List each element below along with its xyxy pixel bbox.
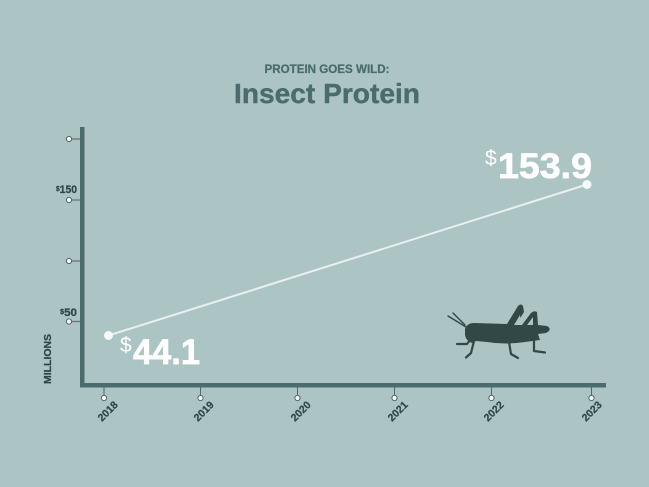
x axis labels: 2019 (192, 399, 217, 424)
y axis label: $150: $ (56, 186, 60, 193)
x axis labels: 2023 (580, 399, 605, 424)
x axis labels: 2020 (289, 399, 314, 424)
x axis labels: 2018 (96, 399, 121, 424)
value label: 2018: 44.1 (133, 333, 200, 372)
chart axes (80, 127, 606, 388)
value label: 2018: $ (120, 334, 132, 357)
x axis labels: 2022 (482, 399, 507, 424)
x axis ticks (101, 387, 594, 401)
y axis label: $50: 50 (64, 307, 77, 319)
value label: 2023: 153.9 (498, 147, 592, 186)
y axis ticks (66, 136, 80, 324)
y axis label: $50: $ (60, 309, 64, 316)
y axis title: MILLIONS (43, 334, 54, 384)
eyebrow heading: PROTEIN GOES WILD: (264, 62, 390, 76)
x axis labels: 2021 (386, 399, 411, 424)
y axis label: $150: 150 (60, 184, 77, 196)
trend line (104, 180, 592, 340)
icon: cricket (448, 304, 550, 358)
x axis labels (96, 399, 605, 424)
title: Insect Protein (234, 78, 420, 109)
value label: 2023: $ (485, 147, 497, 170)
